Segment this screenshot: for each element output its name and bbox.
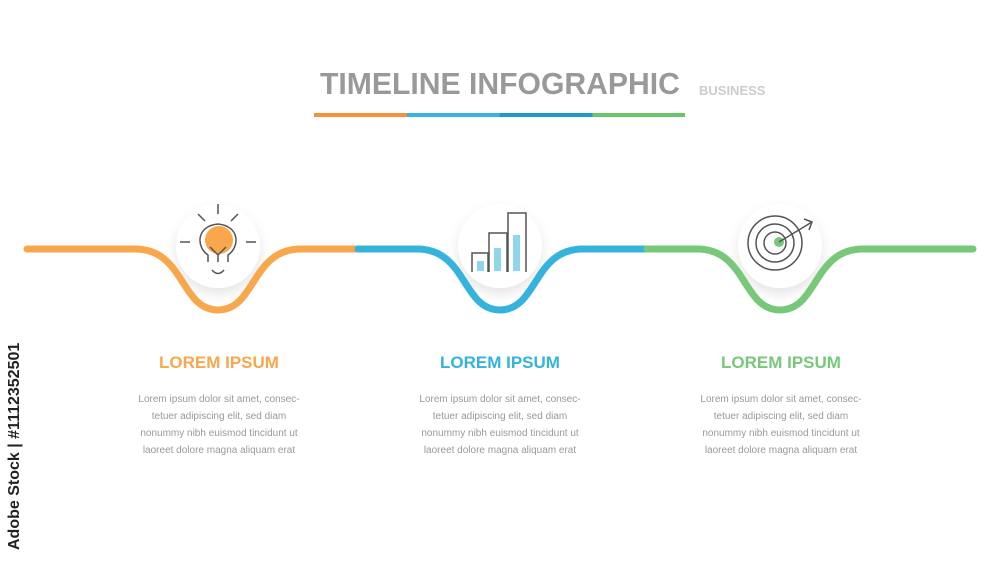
text 1: laoreet dolore magna aliquam erat [143,445,295,456]
subtitle: BUSINESS [699,83,765,98]
icon: bar chart [472,213,526,272]
text 2: laoreet dolore magna aliquam erat [424,445,576,456]
text 3: Lorem ipsum dolor sit amet, consec- [700,394,862,405]
text 1: tetuer adipiscing elit, sed diam [152,411,286,422]
heading 1: LOREM IPSUM [159,353,279,372]
text 3 [700,394,862,456]
heading 3: LOREM IPSUM [721,353,841,372]
text 1: Lorem ipsum dolor sit amet, consec- [138,394,300,405]
text 1: nonummy nibh euismod tincidunt ut [140,428,298,439]
text 3: laoreet dolore magna aliquam erat [705,445,857,456]
icon circles [176,204,822,288]
text 3: tetuer adipiscing elit, sed diam [714,411,848,422]
text 2: tetuer adipiscing elit, sed diam [433,411,567,422]
side text: Adobe Stock | #1112352501 [6,343,23,550]
heading 2: LOREM IPSUM [440,353,560,372]
icon: target [748,216,812,270]
title: TIMELINE INFOGRAPHIC [320,66,680,101]
text 2: Lorem ipsum dolor sit amet, consec- [419,394,581,405]
title underline [314,113,685,117]
text 2: nonummy nibh euismod tincidunt ut [421,428,579,439]
text 3: nonummy nibh euismod tincidunt ut [702,428,860,439]
icon: bulb [180,204,256,274]
wave segments [27,249,973,310]
text 1 [138,394,300,456]
text 2 [419,394,581,456]
